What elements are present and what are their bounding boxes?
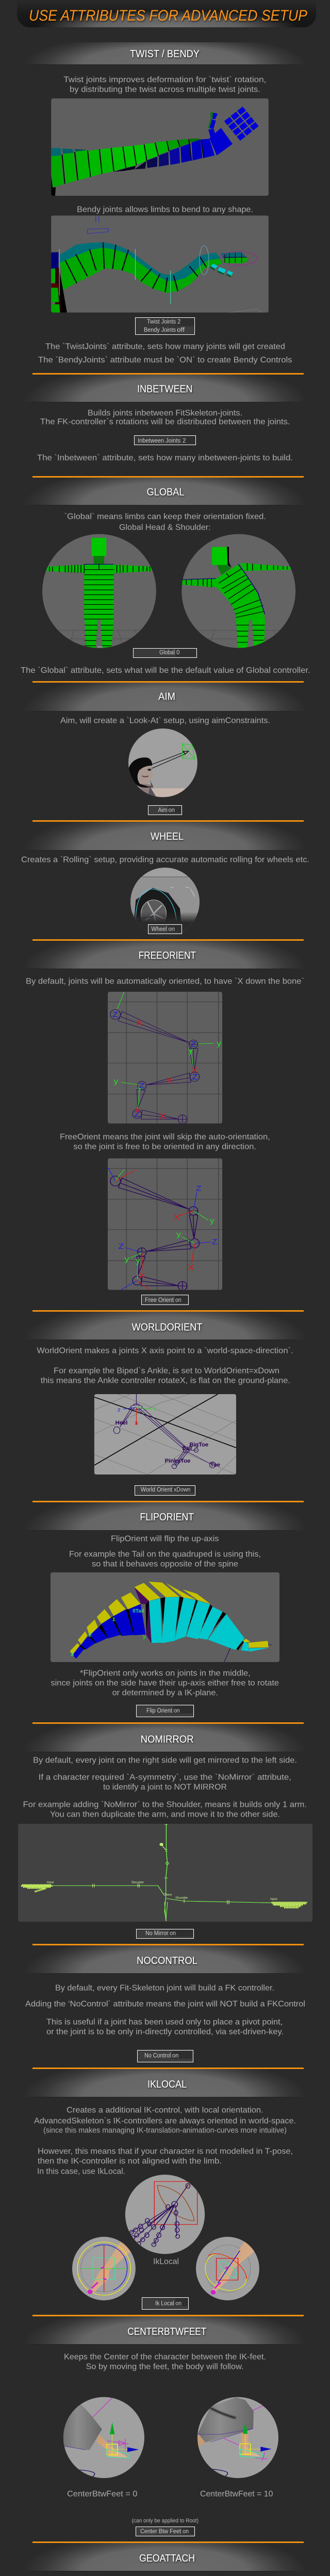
heading: nomirror: NOMIRROR xyxy=(141,1734,194,1745)
image: foot joints on ground plane: z xyxy=(118,1407,121,1413)
heading: twist / bendy: TWIST / BENDY xyxy=(130,48,200,60)
text: worldorient description: this means the Ankle controller rotateX, is flat on the ground-plane. xyxy=(41,1377,290,1385)
attribute box: flip orient: on xyxy=(174,1708,180,1714)
attribute box: aim xyxy=(148,806,182,815)
attribute box: global xyxy=(133,648,197,657)
heading: fliporient xyxy=(23,1502,307,1531)
text: fliporient note: *FlipOrient only works on joints in the middle, xyxy=(80,1669,251,1678)
image: skeleton free-oriented: Z xyxy=(212,1238,218,1246)
text: nocontrol description xyxy=(25,1984,305,2037)
heading: inbetween xyxy=(23,375,307,402)
heading: wheel: WHEEL xyxy=(151,831,184,842)
attribute box: world orient: World Orient xyxy=(141,1487,173,1493)
image: skeleton auto-oriented: y xyxy=(138,1085,142,1092)
section: iklocal xyxy=(23,2067,307,2309)
text: nocontrol description: By default, every Fit-Skeleton joint will build a FK controller. xyxy=(55,1984,274,1992)
attribute box: free orient: on xyxy=(175,1297,182,1303)
image: foot joints on ground plane: Heel xyxy=(116,1419,127,1426)
text: twist intro xyxy=(63,75,266,94)
image: skeleton free-oriented: y xyxy=(136,1257,141,1265)
text: wheel description: Creates a `Rolling` setup, providing accurate automatic rolling for wheels etc. xyxy=(21,855,309,864)
text: freeorient description: FreeOrient means the joint will skip the auto-orientation, xyxy=(60,1133,270,1142)
text: global attribute: The `Global` attribute, sets what will be the default value of Global controller. xyxy=(21,666,310,675)
image: foot joints on ground plane: Toe xyxy=(210,1462,220,1468)
heading: wheel xyxy=(23,822,307,851)
heading: worldorient: WORLDORIENT xyxy=(132,1321,202,1333)
heading: nomirror xyxy=(23,1724,307,1752)
image: quadruped tail: 1 xyxy=(112,1617,116,1622)
image: one-armed skeleton: Shoulder xyxy=(175,1896,188,1900)
labels: centerbtwfeet values: CenterBtwFeet = 0 xyxy=(67,2489,138,2498)
attribute box: flip orient: Flip Orient xyxy=(146,1708,173,1714)
attribute box: no control: on xyxy=(172,2053,178,2059)
text: iklocal description: Creates a additional IK-control, with local orientation. xyxy=(67,2106,263,2115)
heading: geoattach xyxy=(23,2543,307,2571)
image: skeleton auto-oriented: y xyxy=(113,1077,119,1086)
attribute box: aim: on xyxy=(168,807,175,814)
heading: twist / bendy xyxy=(23,42,307,65)
attribute box: wheel: on xyxy=(168,926,175,933)
text: fliporient note: or determined by a IK-plane. xyxy=(112,1689,218,1698)
heading: global xyxy=(23,478,307,505)
image: skeleton auto-oriented: y xyxy=(188,1046,193,1055)
section: inbetween xyxy=(23,373,307,462)
orange divider xyxy=(32,1944,304,1945)
heading: iklocal xyxy=(23,2069,307,2097)
attribute box: global: Global xyxy=(159,650,175,656)
text: global description xyxy=(64,512,266,532)
text: bendy caption: Bendy joints allows limbs to bend to any shape. xyxy=(77,205,253,214)
image: car wheel xyxy=(130,868,200,937)
image: quadruped tail: 3 xyxy=(71,1652,74,1657)
orange divider xyxy=(32,939,304,941)
heading: freeorient: FREEORIENT xyxy=(139,950,196,961)
orange divider xyxy=(32,1722,304,1724)
text: fliporient description: so that it behaves opposite of the spine xyxy=(92,1560,238,1569)
text: centerbtwfeet description xyxy=(64,2353,266,2371)
text: fliporient description xyxy=(69,1534,261,1569)
section: aim xyxy=(23,681,307,815)
image: centerbtwfeet zero xyxy=(61,2397,144,2478)
attribute box: wheel: Wheel xyxy=(152,926,167,933)
image: skeleton free-oriented xyxy=(108,1158,222,1291)
image: one-armed skeleton: Hand xyxy=(47,1881,54,1884)
image: skeleton auto-oriented: Z xyxy=(192,1073,197,1081)
text: nomirror description xyxy=(23,1756,307,1819)
image: skeleton auto-oriented: Z xyxy=(112,1010,118,1019)
title banner xyxy=(17,0,316,27)
text: twist and bendy attributes xyxy=(38,342,292,364)
image: global figure bent xyxy=(181,534,295,648)
text: centerbtwfeet description: So by moving the feet, the body will follow. xyxy=(86,2363,243,2371)
attribute box: inbetween joints xyxy=(134,436,196,445)
text: inbetween attribute: The `Inbetween` attribute, sets how many inbetween-joints to build. xyxy=(37,453,293,462)
heading: aim: AIM xyxy=(158,691,175,703)
text: nomirror description: By default, every joint on the right side will get mirrored to the left side. xyxy=(33,1756,297,1765)
text: nocontrol description: or the joint is to be only in-directly controlled, via set-driven-key. xyxy=(46,2028,284,2037)
section: twist / bendy xyxy=(23,42,307,364)
text: inbetween description xyxy=(40,409,290,427)
image: skeleton free-oriented: X xyxy=(188,1263,194,1272)
attribute box: twist and bendy joints: off xyxy=(177,327,185,333)
image: hand with world-space control xyxy=(72,2237,136,2300)
attribute box: twist and bendy joints: Bendy Joints xyxy=(144,327,176,333)
attribute box: inbetween joints: 2 xyxy=(183,438,186,444)
attribute box: twist and bendy joints xyxy=(135,317,195,335)
heading: worldorient xyxy=(23,1312,307,1340)
image: skeleton free-oriented: X xyxy=(139,1272,145,1280)
attribute box: ik local: Ik Local xyxy=(155,2300,174,2307)
image: foot joints on ground plane: Ball xyxy=(182,1445,192,1451)
attribute box: aim: Aim xyxy=(158,807,167,814)
image: one-armed skeleton: Chest xyxy=(164,1893,172,1896)
section: nomirror xyxy=(18,1722,312,1938)
section: nocontrol xyxy=(23,1944,307,2062)
image: skeleton free-oriented: y xyxy=(176,1230,182,1239)
orange divider xyxy=(32,1501,304,1502)
orange divider xyxy=(32,373,304,375)
orange divider xyxy=(32,476,304,478)
text: iklocal description: (since this makes managing IK-translation-animation-curves more intuitive) xyxy=(43,2126,287,2134)
text: global description: `Global` means limbs can keep their orientation fixed. xyxy=(64,512,266,521)
image: skeleton auto-oriented: X xyxy=(159,1112,166,1121)
orange divider xyxy=(32,2067,304,2069)
heading: geoattach: GEOATTACH xyxy=(139,2553,195,2564)
image: skeleton auto-oriented: X xyxy=(191,1066,197,1074)
attribute box: no mirror: on xyxy=(170,1930,176,1937)
image: skeleton auto-oriented: Z xyxy=(190,1040,196,1048)
image: quadruped tail xyxy=(51,1572,279,1662)
heading: nocontrol: NOCONTROL xyxy=(137,1955,197,1967)
text: twist and bendy attributes: The `TwistJoints` attribute, sets how many joints will get created xyxy=(45,342,285,351)
image: centerbtwfeet ten xyxy=(197,2397,278,2478)
attribute box: ik local xyxy=(142,2298,189,2309)
image: global figure upright xyxy=(42,534,156,648)
text: fliporient note xyxy=(51,1669,279,1698)
text: centerbtwfeet description: Keeps the Center of the character between the IK-feet. xyxy=(64,2353,266,2362)
orange divider xyxy=(32,2541,304,2543)
image: hand with local control xyxy=(196,2237,259,2300)
image: foot joints on ground plane: BigToe xyxy=(189,1442,208,1448)
text: fliporient description: For example the Tail on the quadruped is using this, xyxy=(69,1550,261,1559)
image: skeleton free-oriented: Z xyxy=(196,1184,202,1193)
heading: nocontrol xyxy=(23,1945,307,1974)
attribute box: free orient xyxy=(141,1295,189,1304)
section: global xyxy=(21,476,310,675)
image: skeleton free-oriented: y xyxy=(210,1216,215,1225)
text: worldorient description: WorldOrient makes a joints X axis point to a `world-space-direction`. xyxy=(37,1347,293,1355)
text: inbetween description: The FK-controller`s rotations will be distributed between the joints. xyxy=(40,418,290,427)
image: aim look-at xyxy=(128,728,197,797)
heading: centerbtwfeet xyxy=(23,2316,307,2345)
attribute box: center btw feet xyxy=(136,2527,195,2536)
image: skeleton free-oriented: X xyxy=(174,1213,180,1222)
text: inbetween description: Builds joints inbetween FitSkeleton-joints. xyxy=(88,409,242,418)
text: twist intro: Twist joints improves deformation for `twist` rotation, xyxy=(63,75,266,84)
image: skeleton auto-oriented: X xyxy=(166,1076,172,1085)
attribute box: world orient xyxy=(135,1486,195,1495)
attribute box: no mirror xyxy=(136,1929,194,1938)
text: iklocal description: In this case, use IkLocal. xyxy=(37,2167,125,2176)
heading: freeorient xyxy=(23,941,307,969)
image: bendy arm xyxy=(51,215,269,313)
image: hand joints with ik control xyxy=(125,2175,205,2254)
image: one-armed skeleton: Hand xyxy=(270,1898,277,1901)
attribute box: world orient: xDown xyxy=(174,1487,190,1493)
orange divider xyxy=(32,1310,304,1312)
text: aim description: Aim, will create a `Look-At` setup, using aimConstraints. xyxy=(60,716,270,725)
image: skeleton auto-oriented: X xyxy=(135,1106,141,1115)
text: nomirror description: to identify a joint to NOT MIRROR xyxy=(103,1783,227,1792)
text: nomirror description: For example adding `NoMirror` to the Shoulder, means it builds only 1 arm. xyxy=(23,1801,307,1809)
image: quadruped tail: 2 xyxy=(88,1633,92,1638)
orange divider xyxy=(32,681,304,683)
text: nocontrol description: Adding the ‘NoControl` attribute means the joint will NOT build a FKControl xyxy=(25,1999,305,2008)
image: quadruped tail: y xyxy=(143,1633,146,1639)
heading: inbetween: INBETWEEN xyxy=(137,384,193,395)
image: one-armed skeleton xyxy=(18,1824,312,1922)
image: skeleton free-oriented: y xyxy=(125,1255,129,1263)
attribute box: flip orient xyxy=(136,1705,194,1717)
image: foot joints on ground plane: x xyxy=(135,1420,139,1426)
attribute box: no mirror: No Mirror xyxy=(145,1930,169,1937)
text: nomirror description: You can then duplicate the arm, and move it to the other side. xyxy=(50,1810,280,1819)
labels: centerbtwfeet values: CenterBtwFeet = 10 xyxy=(200,2489,273,2498)
label: iklocal: IkLocal xyxy=(153,2257,179,2266)
attribute box: wheel xyxy=(148,924,182,934)
orange divider xyxy=(32,820,304,822)
attribute box: no control xyxy=(137,2050,193,2062)
image: skeleton auto-oriented: y xyxy=(217,1039,222,1048)
text: twist and bendy attributes: The `BendyJoints` attribute must be `ON` to create Bendy Controls xyxy=(38,355,292,364)
image: foot joints on ground plane: PinkyToe xyxy=(165,1458,190,1464)
text: iklocal description: then the IK-controller is not aligned with the limb. xyxy=(38,2157,222,2165)
text: worldorient description: For example the Biped`s Ankle, is set to WorldOrient=xDown xyxy=(54,1367,279,1376)
text: iklocal description: However, this means that if your character is not modelled in T-pose, xyxy=(38,2147,293,2156)
image: twist arm xyxy=(51,98,269,196)
text: iklocal description: AdvancedSkeleton`s IK-controllers are always oriented in world-space. xyxy=(34,2117,296,2126)
text: nomirror description: If a character required `A-symmetry`, use the `NoMirror` attribute, xyxy=(39,1773,291,1782)
heading: iklocal: IKLOCAL xyxy=(147,2079,187,2090)
section: freeorient xyxy=(23,939,307,1304)
text: freeorient description xyxy=(60,1133,270,1151)
image: foot joints on ground plane: y xyxy=(153,1406,157,1411)
attribute box: ik local: on xyxy=(175,2300,182,2307)
image: skeleton auto-oriented: Z xyxy=(134,1110,140,1118)
section: worldorient xyxy=(23,1310,307,1495)
image: quadruped tail: 0Tail xyxy=(133,1608,144,1614)
heading: centerbtwfeet: CENTERBTWFEET xyxy=(127,2326,206,2337)
text: freeorient description: so the joint is free to be oriented in any direction. xyxy=(73,1143,256,1151)
attribute box: free orient: Free Orient xyxy=(145,1297,174,1303)
image: skeleton auto-oriented: Z xyxy=(139,1081,144,1090)
attribute box: center btw feet: Center Btw Feet xyxy=(140,2529,182,2535)
image: skeleton free-oriented: Z xyxy=(118,1242,124,1251)
section: geoattach xyxy=(32,2541,304,2571)
section: fliporient xyxy=(23,1501,307,1717)
attribute box: twist and bendy joints: 2 xyxy=(177,319,180,325)
section: wheel xyxy=(21,820,309,938)
text: fliporient description: FlipOrient will flip the up-axis xyxy=(111,1534,219,1543)
heading: fliporient: FLIPORIENT xyxy=(140,1512,194,1523)
attribute box: no control: No Control xyxy=(144,2053,171,2059)
image: one-armed skeleton: Shoulder xyxy=(131,1881,144,1884)
orange divider xyxy=(32,2315,304,2316)
attribute box: twist and bendy joints: Twist Joints xyxy=(147,319,176,325)
attribute box: center btw feet: on xyxy=(183,2529,189,2535)
image: foot joints on ground plane xyxy=(94,1394,236,1475)
text: default orientation: By default, joints will be automatically oriented, to have `X down the bone` xyxy=(26,977,304,986)
text: global description: Global Head & Shoulder: xyxy=(119,523,211,532)
text: iklocal description xyxy=(34,2106,296,2176)
attribute box: global: 0 xyxy=(176,650,179,656)
text: worldorient description xyxy=(37,1347,293,1385)
section: centerbtwfeet xyxy=(23,2315,307,2536)
text: twist intro: by distributing the twist across multiple twist joints. xyxy=(70,85,260,94)
text: fliporient note: since joints on the side have their up-axis either free to rotate xyxy=(51,1679,279,1688)
image: skeleton auto-oriented xyxy=(108,992,222,1124)
heading: global: GLOBAL xyxy=(146,487,185,498)
labels: centerbtwfeet values xyxy=(67,2489,273,2498)
image: skeleton auto-oriented: X xyxy=(136,1019,142,1027)
attribute box: inbetween joints: Inbetween Joints xyxy=(138,438,180,444)
text: nocontrol description: This is useful if a joint has been used only to place a pivot point, xyxy=(46,2018,283,2027)
heading: aim xyxy=(23,683,307,711)
note: root only: (can only be applied to Root) xyxy=(132,2518,199,2524)
